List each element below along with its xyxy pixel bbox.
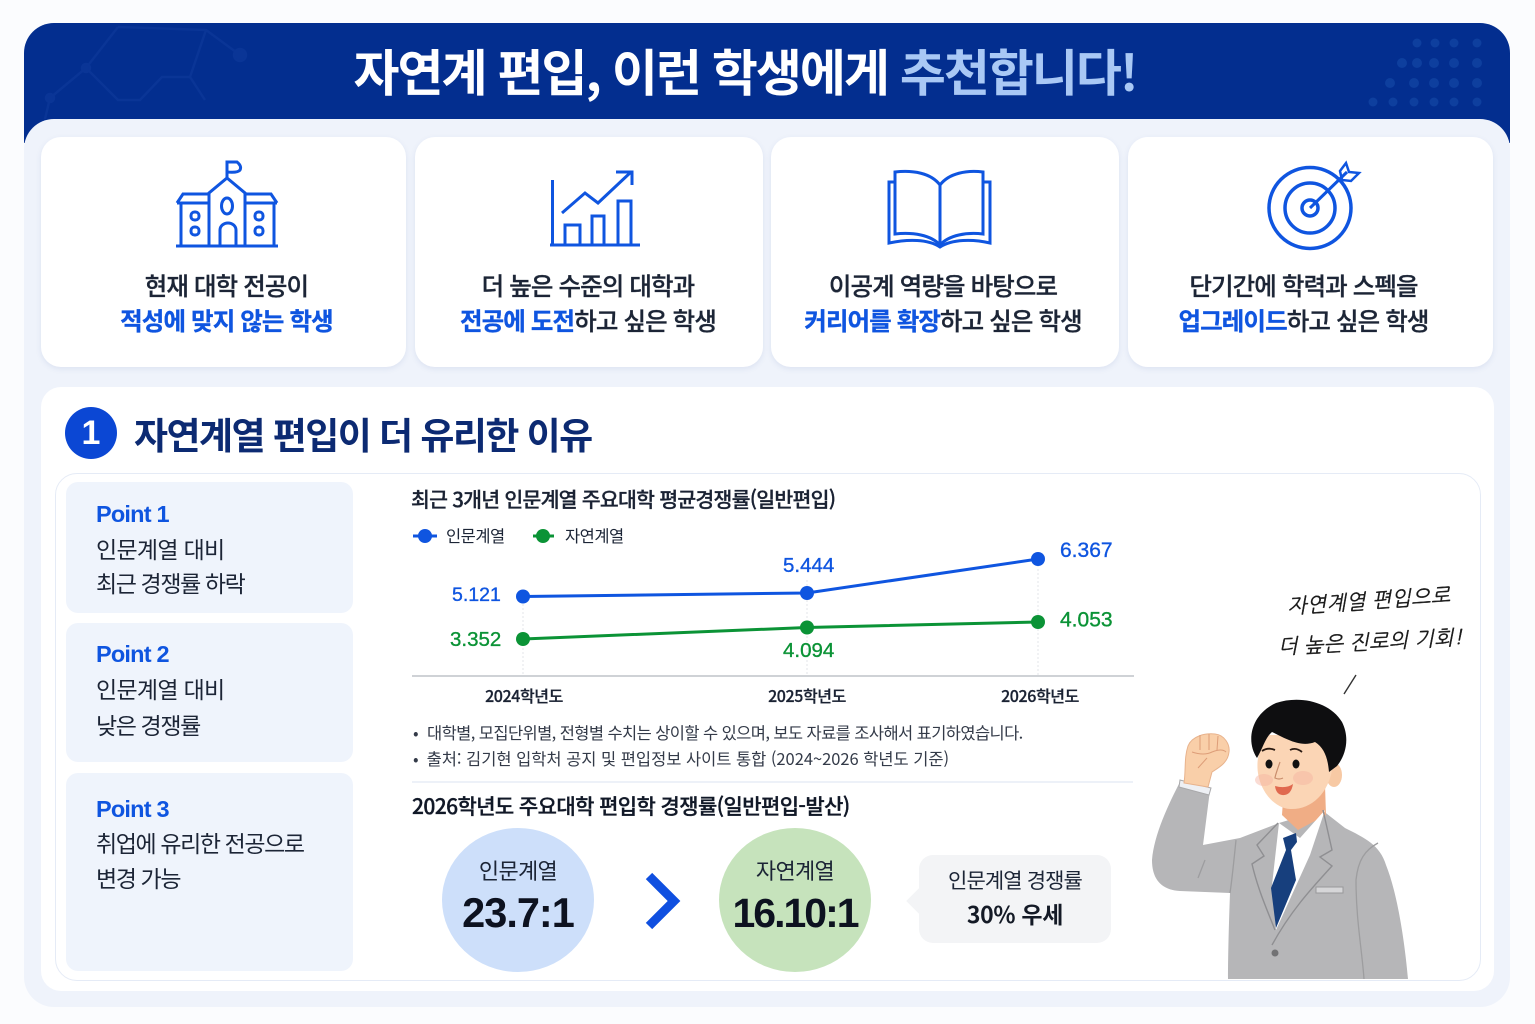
text: card 1: 적성에 맞지 않는 학생: [120, 303, 333, 338]
series: 인문계열: [452, 539, 1113, 606]
circle: 자연계열: 자연계열: [756, 854, 834, 886]
panel: section 1: [41, 387, 1494, 991]
hair: [1251, 700, 1346, 772]
lapels: [1252, 810, 1332, 945]
point 3 line 1: 취업에 유리한 전공으로: [96, 825, 304, 859]
button: [1272, 950, 1278, 956]
legend: [413, 523, 624, 547]
ear: [1326, 763, 1342, 787]
line chart: [412, 523, 1134, 707]
text: card 1: [120, 268, 333, 338]
series: 자연계열: 4.053: [1060, 608, 1113, 632]
icon: open book: [888, 170, 992, 249]
handwritten quote: [1278, 584, 1463, 657]
decorative dot pattern: [1368, 38, 1482, 106]
circle: 인문계열: [442, 828, 594, 972]
point 1 line 1: 인문계열 대비: [96, 531, 225, 565]
inner frame: [55, 473, 1481, 981]
text: card 3: 커리어를 확장하고 싶은 학생: [804, 303, 1082, 338]
circle: 인문계열: 인문계열: [479, 854, 557, 886]
circle: 자연계열: [719, 828, 871, 972]
suit shading: [1198, 840, 1378, 979]
panel: point 3: [66, 773, 353, 971]
icon: school: [176, 160, 278, 248]
cuff: [1179, 780, 1211, 795]
arrow: greater than: [646, 872, 680, 930]
footnotes: [413, 720, 1023, 770]
neck: [1282, 785, 1326, 830]
axis labels: 2025학년도: [768, 683, 846, 707]
fist: [1184, 734, 1229, 787]
circle: 인문계열: 23.7:1: [462, 889, 574, 936]
panel: card 2: [415, 137, 763, 367]
nose: [1275, 762, 1283, 779]
series: 인문계열: 6.367: [1060, 539, 1113, 562]
text: card 1: 현재 대학 전공이: [145, 268, 308, 303]
handwritten quote: 자연계열 편입으로: [1286, 584, 1451, 617]
comparison heading: 2026학년도 주요대학 편입학 경쟁률(일반편입-발산): [412, 791, 850, 821]
legend: 인문계열: [446, 523, 505, 547]
text: card 4: 업그레이드하고 싶은 학생: [1179, 303, 1428, 338]
panel: point 2: [66, 623, 353, 762]
panel: card 3: [771, 137, 1119, 367]
title: 자연계 편입, 이런 학생에게 추천합니다!: [354, 34, 1136, 106]
point 1 label: Point 1: [96, 501, 169, 527]
callout pointer: [906, 888, 932, 914]
panel: point 1: [66, 482, 353, 613]
text: card 2: [460, 268, 716, 338]
handwritten quote: 더 높은 진로의 기회!: [1278, 626, 1463, 657]
face: [1257, 735, 1333, 809]
series: 자연계열: [450, 608, 1113, 662]
point 2 label: Point 2: [96, 641, 169, 667]
point 1 line 2: 최근 경쟁률 하락: [96, 565, 244, 599]
decorative hexagon pattern: [24, 23, 324, 143]
legend: 자연계열: [565, 523, 624, 547]
series: 인문계열: 5.121: [452, 584, 501, 606]
circle: 자연계열: 16.10:1: [732, 890, 858, 936]
cheeks: [1255, 774, 1273, 786]
suit: [1152, 780, 1408, 979]
mouth: [1275, 784, 1293, 795]
text: card 3: 이공계 역량을 바탕으로: [829, 268, 1057, 303]
text: card 4: 단기간에 학력과 스펙을: [1189, 268, 1418, 303]
header banner: [24, 23, 1510, 143]
series: 인문계열: 5.444: [783, 554, 834, 577]
panel: card 4: [1128, 137, 1493, 367]
section heading: 자연계열 편입이 더 유리한 이유: [134, 406, 592, 460]
callout: 인문계열 경쟁률: [948, 865, 1082, 895]
text: card 2: 전공에 도전하고 싶은 학생: [460, 303, 716, 338]
footnotes: • 대학별, 모집단위별, 전형별 수치는 상이할 수 있으며, 보도 자료를 조사해서 표기하였습니다.: [413, 720, 1023, 744]
shirt: [1272, 810, 1325, 930]
icon: growth chart: [550, 170, 640, 246]
callout: 30% 우세: [967, 896, 1063, 930]
section number badge: 1: [82, 414, 100, 452]
quote tick: [1344, 674, 1356, 694]
eyes: [1266, 760, 1272, 768]
brows: [1262, 749, 1302, 752]
point 2 line 1: 인문계열 대비: [96, 671, 225, 705]
chart heading: 최근 3개년 인문계열 주요대학 평균경쟁률(일반편입): [411, 483, 835, 513]
axis labels: 2024학년도: [485, 683, 563, 707]
text: card 2: 더 높은 수준의 대학과: [482, 268, 694, 303]
panel: card 1: [41, 137, 406, 367]
pocket: [1316, 887, 1343, 893]
series: 자연계열: 3.352: [450, 628, 501, 651]
text: card 3: [804, 268, 1082, 338]
illustration: student in grey suit: [1152, 700, 1408, 979]
footnotes: • 출처: 김기현 입학처 공지 및 편입정보 사이트 통합 (2024~2026 학년도 기준): [413, 746, 949, 770]
point 2 line 2: 낮은 경쟁률: [96, 707, 200, 741]
axis labels: [485, 683, 1079, 707]
text: card 4: [1179, 268, 1428, 338]
axis labels: 2026학년도: [1001, 683, 1079, 707]
point 3 label: Point 3: [96, 796, 169, 822]
point 3 line 2: 변경 가능: [96, 860, 180, 894]
callout: [919, 855, 1111, 943]
icon: target with arrow: [1267, 160, 1362, 250]
series: 자연계열: 4.094: [783, 639, 834, 662]
tie: [1271, 833, 1297, 928]
section number badge: [65, 407, 117, 459]
